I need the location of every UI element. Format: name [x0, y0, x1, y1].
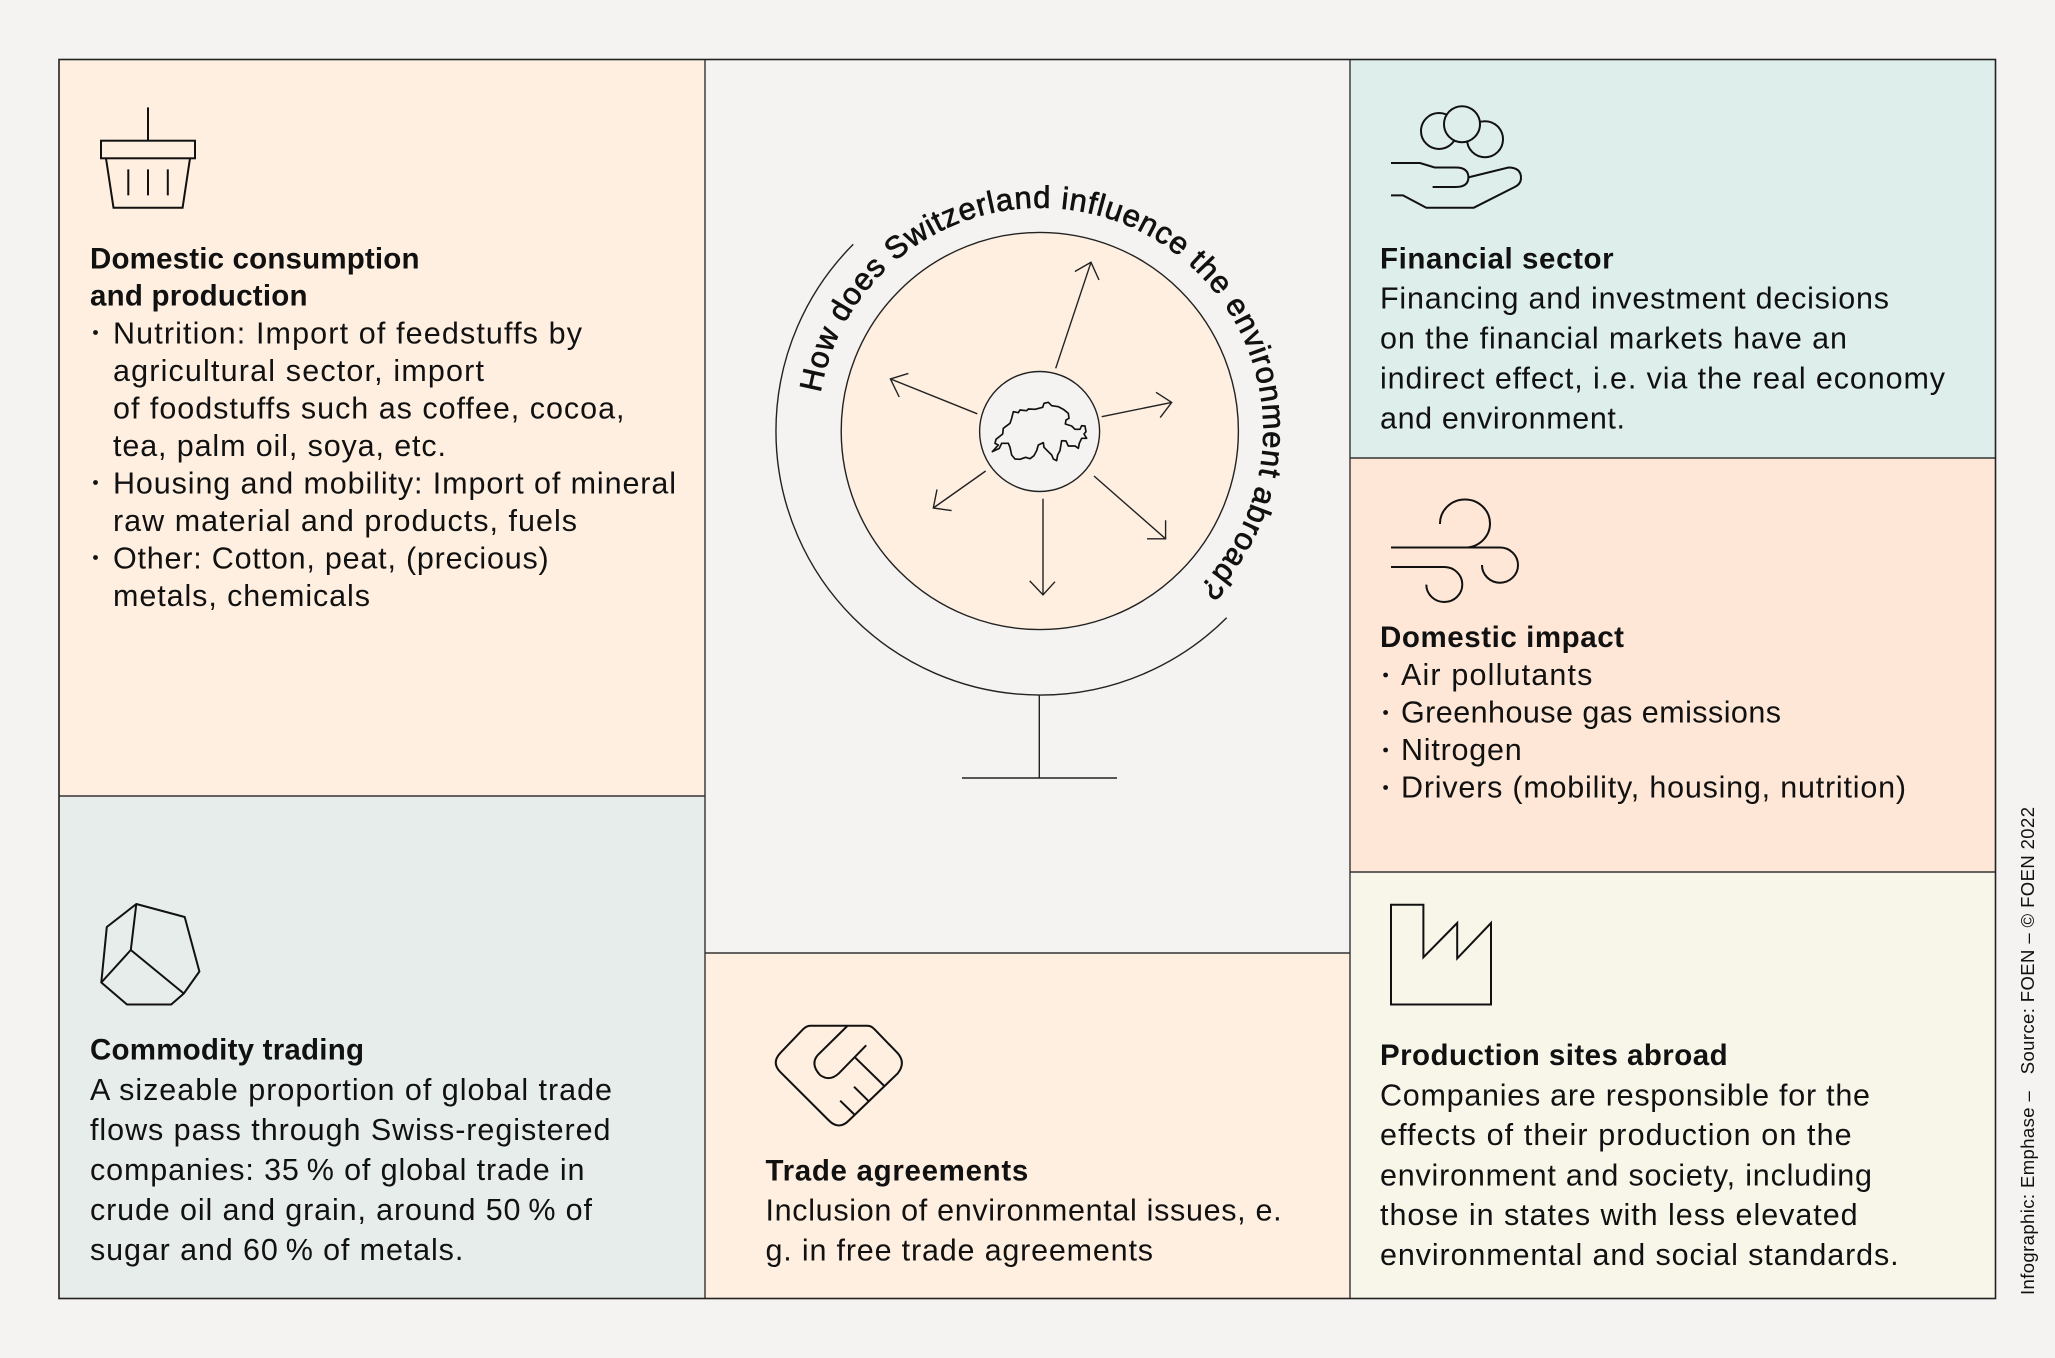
text block: production sites abroad: those in states with less elevated	[1380, 1198, 1858, 1232]
globe outer arc	[776, 244, 1227, 695]
text block: commodity trading	[90, 1073, 612, 1267]
panel: trade agreements	[705, 953, 1350, 1299]
icon: shopping basket	[101, 107, 195, 208]
text block: production sites abroad: environment and society, including	[1380, 1158, 1872, 1192]
panel: domestic impact	[1350, 458, 1996, 872]
text block: production sites abroad: Companies are responsible for the	[1380, 1078, 1870, 1112]
icon: handshake	[776, 1026, 902, 1126]
text block: trade agreements	[766, 1194, 1282, 1268]
text block: list of imports	[93, 316, 676, 613]
text block: financial sector: on the financial markets have an	[1380, 322, 1847, 356]
centre circle	[980, 372, 1100, 492]
arrow: north-west	[890, 373, 977, 414]
text block: financial sector: Financing and investment decisions	[1380, 282, 1889, 316]
arrow: south	[1030, 499, 1055, 595]
text block: domestic impact list: Drivers (mobility, housing, nutrition)	[1401, 770, 1906, 804]
heading: domestic impact: Domestic impact	[1380, 621, 1624, 654]
heading: domestic consumption and production: and production	[90, 280, 308, 312]
text block: commodity trading: crude oil and grain, around 50 % of	[90, 1193, 593, 1227]
map outline: Switzerland	[992, 402, 1087, 461]
text block: production sites abroad	[1380, 1078, 1899, 1272]
text block: domestic impact list	[1383, 658, 1906, 804]
text block: domestic impact list: Nitrogen	[1401, 733, 1522, 767]
heading: financial sector: Financial sector	[1380, 242, 1614, 276]
panel: central globe	[775, 185, 1280, 779]
icon: wind	[1391, 500, 1518, 602]
icon: factory	[1391, 905, 1491, 1004]
globe disc	[841, 232, 1238, 630]
arrow: north-east	[1056, 262, 1099, 368]
arrow: south-west	[933, 471, 986, 511]
text block: commodity trading: flows pass through Swiss-registered	[90, 1113, 610, 1147]
icon: raw mineral rock	[101, 904, 199, 1004]
text block: trade agreements: g. in free trade agreements	[766, 1234, 1153, 1268]
heading: domestic consumption and production: Domestic consumption	[90, 242, 420, 276]
arrow: east	[1102, 392, 1172, 418]
text block: trade agreements: Inclusion of environmental issues, e.	[766, 1194, 1282, 1228]
text block: list of imports: tea, palm oil, soya, etc.	[113, 429, 446, 463]
panel: production sites abroad	[1350, 872, 1996, 1299]
text block: list of imports: raw material and products, fuels	[113, 504, 577, 538]
panel: commodity trading	[59, 796, 705, 1299]
heading: commodity trading: Commodity trading	[90, 1034, 364, 1067]
text block: domestic impact list: Air pollutants	[1401, 658, 1592, 692]
text block: domestic impact list: Greenhouse gas emissions	[1401, 696, 1781, 730]
text block: commodity trading: sugar and 60 % of metals.	[90, 1233, 463, 1267]
text block: production sites abroad: effects of their production on the	[1380, 1118, 1852, 1152]
text block: commodity trading: A sizeable proportion of global trade	[90, 1073, 612, 1107]
curved title: How does Switzerland influence the environment abroad?	[800, 185, 1280, 600]
text block: list of imports: Housing and mobility: Import of mineral	[113, 466, 676, 500]
text block: commodity trading: companies: 35 % of global trade in	[90, 1153, 584, 1187]
panel: financial sector	[1350, 59, 1996, 458]
text block: list of imports: metals, chemicals	[113, 579, 370, 613]
heading: production sites abroad: Production sites abroad	[1380, 1039, 1728, 1072]
text block: financial sector	[1380, 282, 1946, 436]
arrow: south-east	[1094, 476, 1166, 539]
text block: list of imports: agricultural sector, import	[113, 354, 485, 388]
panel: domestic consumption and production	[59, 59, 705, 796]
globe stand	[962, 694, 1117, 778]
text block: financial sector: and environment.	[1380, 402, 1625, 436]
credit line: Infographic: Emphase – Source: FOEN – © FOEN 2022	[2017, 807, 2038, 1295]
heading: trade agreements: Trade agreements	[766, 1155, 1028, 1188]
text block: list of imports: Other: Cotton, peat, (precious)	[113, 542, 549, 576]
text block: financial sector: indirect effect, i.e. via the real economy	[1380, 362, 1946, 396]
text block: production sites abroad: environmental and social standards.	[1380, 1238, 1899, 1272]
text block: list of imports: Nutrition: Import of feedstuffs by	[113, 316, 583, 350]
heading: domestic consumption and production	[90, 242, 420, 312]
icon: hand with coins	[1391, 106, 1521, 208]
text block: list of imports: of foodstuffs such as coffee, cocoa,	[113, 392, 624, 426]
